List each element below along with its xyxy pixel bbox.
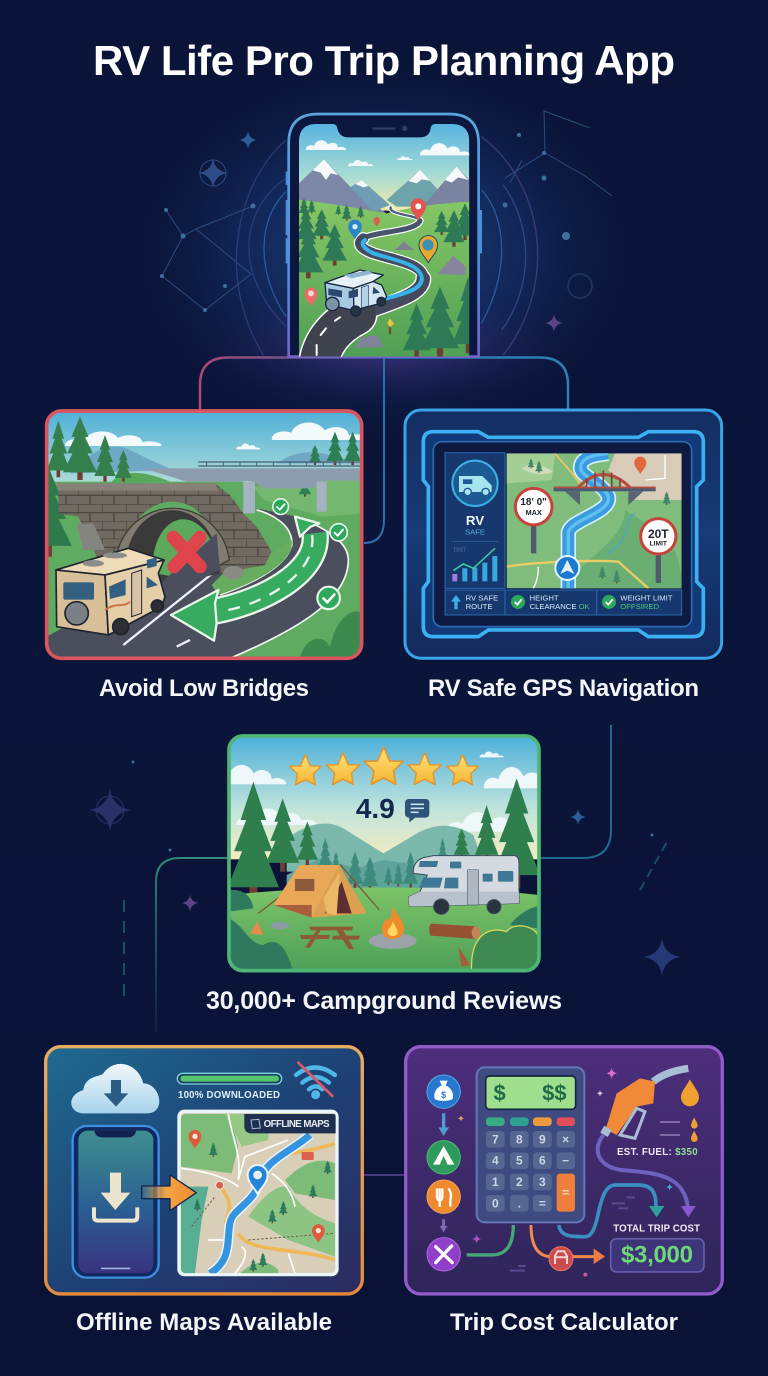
label: Trip Cost Calculator: Trip Cost Calculator <box>450 1309 678 1336</box>
navigation arrow marker <box>555 556 579 580</box>
flow line teal to total <box>559 1185 664 1237</box>
panel: Offline Maps Available illustration <box>46 1047 362 1294</box>
flow line green <box>467 1225 513 1255</box>
RV icon circle <box>452 461 498 506</box>
icon: food <box>427 1180 460 1213</box>
phone notch details <box>372 126 407 131</box>
side buttons <box>286 172 482 263</box>
key labels: 5 <box>516 1154 523 1168</box>
blue location pin <box>248 1165 268 1194</box>
connector: campground reviews to offline maps <box>156 858 228 1032</box>
connector: phone to Avoid Low Bridges <box>200 358 384 410</box>
key labels: 8 <box>516 1132 523 1146</box>
key labels: 0 <box>492 1196 499 1210</box>
background decoration: rings, constellations and compass stars <box>89 111 681 1000</box>
RV safe route status <box>451 594 498 611</box>
five rating stars <box>289 747 479 785</box>
flow arrow purple to total <box>681 1206 696 1217</box>
map pin <box>634 457 646 474</box>
key labels: 2 <box>516 1175 523 1189</box>
total value box <box>611 1239 704 1272</box>
left status column: SAFE <box>465 528 485 537</box>
connector: phone centre trunk <box>364 357 384 543</box>
sparkles <box>458 1068 673 1277</box>
map view <box>507 453 682 588</box>
RV safe route status: RV SAFE <box>466 594 498 603</box>
panel border <box>229 736 539 971</box>
RV SAFE label: RV <box>466 513 484 528</box>
scene <box>48 412 360 656</box>
overpass <box>143 462 362 513</box>
fuel estimate: EST. FUEL: $350 <box>617 1147 698 1158</box>
RV beige <box>56 548 165 635</box>
height clearance status <box>511 594 591 611</box>
total label: TOTAL TRIP COST <box>613 1224 700 1235</box>
icon: utensils <box>427 1238 460 1271</box>
RV on screen <box>325 270 387 316</box>
fuel drop <box>681 1079 699 1106</box>
panel: Trip Cost Calculator illustration <box>406 1047 722 1294</box>
key labels: = <box>562 1186 569 1200</box>
map pins <box>189 1130 325 1243</box>
RV safe route status: ROUTE <box>466 602 492 611</box>
label: Avoid Low Bridges: Avoid Low Bridges <box>99 675 309 702</box>
connector: phone to RV Safe GPS Navigation <box>384 358 568 410</box>
RV white <box>408 856 519 914</box>
panel frame <box>46 1047 362 1294</box>
log <box>429 924 480 939</box>
key labels: × <box>562 1132 569 1146</box>
winding road <box>317 207 423 367</box>
title: RV Life Pro Trip Planning App <box>93 37 675 84</box>
bottom status row <box>445 590 682 615</box>
label: Offline Maps Available: Offline Maps Available <box>76 1309 332 1336</box>
scene <box>230 738 538 969</box>
sign: height limit <box>515 488 552 553</box>
calculator display: $ <box>494 1081 506 1106</box>
icon: money bag <box>427 1075 460 1108</box>
download status text: 100% DOWNLOADED <box>178 1090 280 1101</box>
key labels: 1 <box>492 1175 499 1189</box>
calculator <box>477 1067 584 1222</box>
number keys <box>486 1131 575 1212</box>
label: 30,000+ Campground Reviews: 30,000+ Campground Reviews <box>206 987 562 1015</box>
red X marker <box>173 537 200 567</box>
review speech bubble <box>405 799 429 822</box>
panel: Avoid Low Bridges illustration <box>25 411 368 660</box>
icon: tent <box>427 1141 460 1174</box>
key labels: 4 <box>492 1154 499 1168</box>
panel: RV Safe GPS Navigation illustration <box>405 410 722 658</box>
map pins <box>411 198 426 221</box>
key labels: . <box>518 1196 521 1210</box>
cloud download icon <box>71 1064 159 1113</box>
tent <box>258 864 379 918</box>
road surface <box>47 508 348 658</box>
sign: weight limit: 20T <box>648 527 669 541</box>
screen bezel <box>433 442 692 627</box>
key labels: 7 <box>492 1132 499 1146</box>
phone with download arrow <box>73 1126 159 1278</box>
key labels <box>492 1132 569 1210</box>
label: RV Safe GPS Navigation: RV Safe GPS Navigation <box>428 675 699 702</box>
grass patch between roads <box>212 540 292 595</box>
fuel gauge lines <box>660 1117 698 1142</box>
sign: height limit: MAX <box>526 508 542 517</box>
sign: weight limit <box>641 519 676 583</box>
red arch bridge <box>554 471 656 505</box>
stone bridge <box>57 483 272 590</box>
key labels: 6 <box>539 1154 546 1168</box>
height clearance status: HEIGHT <box>530 594 559 603</box>
glowing inner frame <box>423 432 703 637</box>
orange transfer arrow <box>142 1175 196 1211</box>
calculator display: $$ <box>542 1081 567 1106</box>
panel frame <box>406 1047 722 1294</box>
key labels: 9 <box>539 1132 546 1146</box>
no wifi icon <box>296 1063 335 1097</box>
panel: 30,000+ Campground Reviews illustration <box>214 736 556 971</box>
key labels: 3 <box>539 1175 546 1189</box>
icon: money bag: $ <box>441 1090 447 1100</box>
panel: phone hero <box>286 114 484 367</box>
key labels: = <box>539 1196 546 1210</box>
key labels: − <box>562 1154 569 1168</box>
weight limit status <box>602 594 673 611</box>
connector: offline maps to trip cost calculator <box>364 1174 404 1176</box>
rating value: 4.9 <box>356 793 395 824</box>
left status column <box>445 453 505 588</box>
category icons column <box>427 1075 460 1271</box>
campfire <box>369 906 417 949</box>
offline maps badge: OFFLINE MAPS <box>264 1119 330 1130</box>
outer device frame <box>405 410 722 658</box>
offline map card <box>179 1111 337 1275</box>
weight limit status: WEIGHT LIMIT <box>620 594 673 603</box>
flow arrows between icons <box>438 1113 449 1233</box>
calculator display <box>486 1076 576 1109</box>
function keys <box>486 1117 575 1126</box>
offline maps badge <box>244 1114 336 1133</box>
small dashes <box>510 1197 635 1271</box>
download progress bar <box>177 1073 282 1084</box>
connector: GPS navigation to campground reviews <box>540 725 611 858</box>
panel border <box>47 411 362 658</box>
total value box: $3,000 <box>621 1242 693 1269</box>
sign: weight limit: LIMIT <box>650 540 667 547</box>
mini bar chart: DIST <box>454 548 467 554</box>
weight limit status: OFFSIRED <box>620 602 659 611</box>
phone screen landscape <box>299 124 470 357</box>
green detour arrow <box>171 517 319 641</box>
bushes <box>300 611 362 658</box>
picnic table <box>300 927 360 949</box>
height clearance status: CLEARANCE OK <box>530 602 591 611</box>
fuel pump nozzle <box>598 1068 688 1210</box>
sign: height limit: 18' 0" <box>520 497 547 508</box>
flow line orange with vehicle icon <box>531 1225 605 1271</box>
phone body <box>289 114 479 357</box>
route check marks <box>273 499 347 609</box>
